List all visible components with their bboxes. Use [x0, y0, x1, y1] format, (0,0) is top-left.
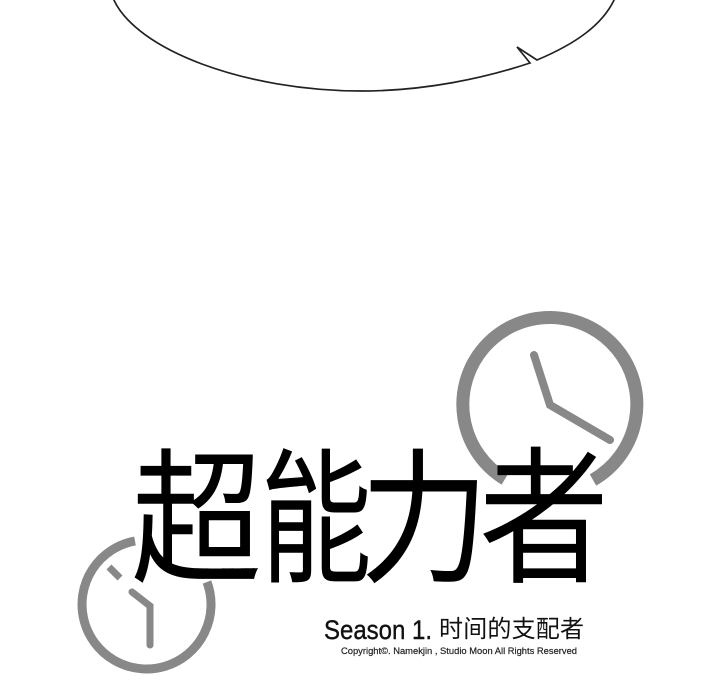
icon: large clock: [463, 317, 637, 480]
copyright: Copyright©. Namekjin , Studio Moon All Rights Reserved: [341, 646, 577, 657]
title: [131, 400, 609, 615]
speech bubble: [113, 0, 615, 91]
subtitle: [324, 615, 584, 645]
title: 者: [479, 400, 609, 615]
title: 超: [131, 402, 262, 613]
title: 力: [360, 401, 489, 613]
subtitle: 时间的支配者: [439, 616, 584, 643]
title: 能: [260, 403, 372, 614]
icon: small clock: [82, 541, 211, 669]
subtitle: Season 1.: [324, 615, 432, 645]
